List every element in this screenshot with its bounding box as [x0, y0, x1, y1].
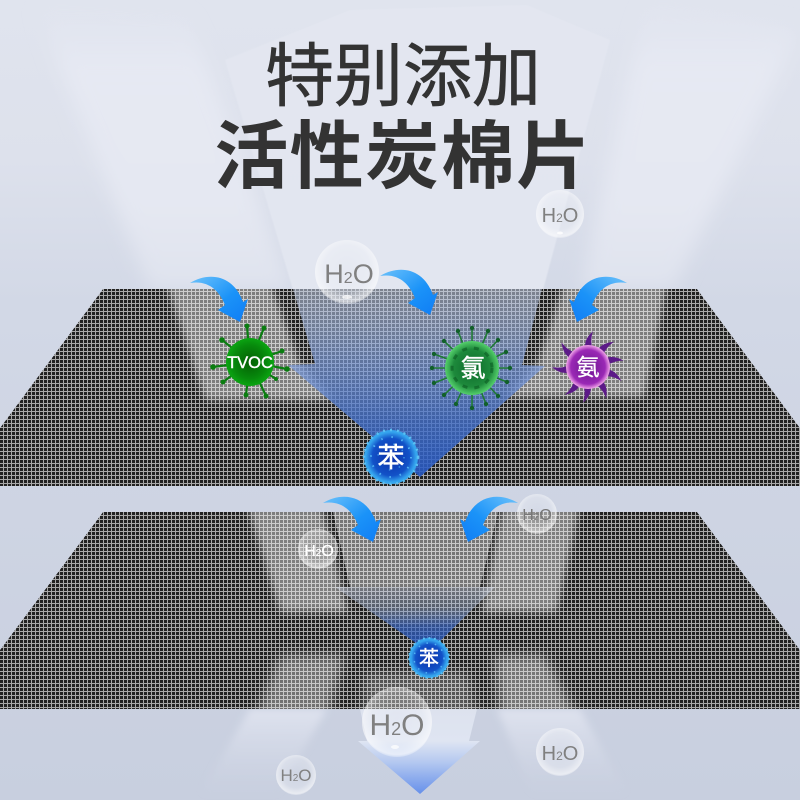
title	[214, 38, 592, 198]
lit centre	[288, 289, 545, 477]
virus: benzene large: 苯	[378, 443, 404, 473]
bubble: H2O bottom centre: H2O	[369, 709, 425, 742]
lit beam left	[247, 505, 348, 612]
bubble: H2O upper centre: H2O	[324, 259, 374, 289]
title: 特别添加	[265, 38, 541, 115]
arrow: into ammonia	[569, 277, 627, 322]
bubble: H2O bottom right: H2O	[542, 743, 578, 765]
virus: chlorine	[430, 326, 512, 410]
lit beams at bottom edge	[255, 655, 345, 718]
bottom water arrow	[358, 709, 480, 794]
bubble: H2O bottom left	[276, 755, 316, 795]
virus: TVOC	[210, 324, 290, 398]
bubble: H2O upper centre	[315, 240, 379, 304]
virus: ammonia	[552, 331, 624, 403]
bubble: H2O bottom left: H2O	[280, 766, 312, 785]
bubble: H2O lower left: H2O	[304, 543, 334, 560]
panel: lower activated carbon mesh layer	[0, 505, 800, 718]
bubble: H2O top right: H2O	[542, 205, 578, 227]
virus: TVOC: TVOC	[227, 354, 273, 372]
lit beam right	[482, 505, 580, 612]
bubble: H2O bottom centre	[362, 687, 432, 757]
virus: benzene small: 苯	[419, 647, 439, 670]
lit beam right	[505, 280, 668, 397]
virus: benzene large	[364, 430, 418, 484]
virus: chlorine: 氯	[460, 355, 486, 383]
bubble: H2O bottom right	[536, 728, 584, 776]
bubble: H2O lower left	[298, 529, 338, 569]
lit beam left	[165, 280, 335, 400]
arrow: lower right	[460, 497, 518, 542]
blue funnel	[336, 587, 494, 643]
arrow: lower left	[323, 497, 381, 542]
bubble: H2O lower right	[517, 494, 557, 534]
lit beam centre	[333, 512, 498, 587]
bubble: H2O lower right: H2O	[522, 507, 552, 524]
bubble: H2O top right	[536, 190, 584, 238]
arrow: into TVOC	[190, 277, 248, 322]
virus: ammonia: 氨	[576, 354, 600, 380]
blue funnel	[288, 289, 545, 477]
virus: benzene small	[409, 638, 449, 678]
panel: upper activated carbon mesh layer	[0, 280, 800, 486]
arrow: into chlorine	[380, 270, 438, 315]
title: 活性炭棉片	[214, 115, 592, 198]
